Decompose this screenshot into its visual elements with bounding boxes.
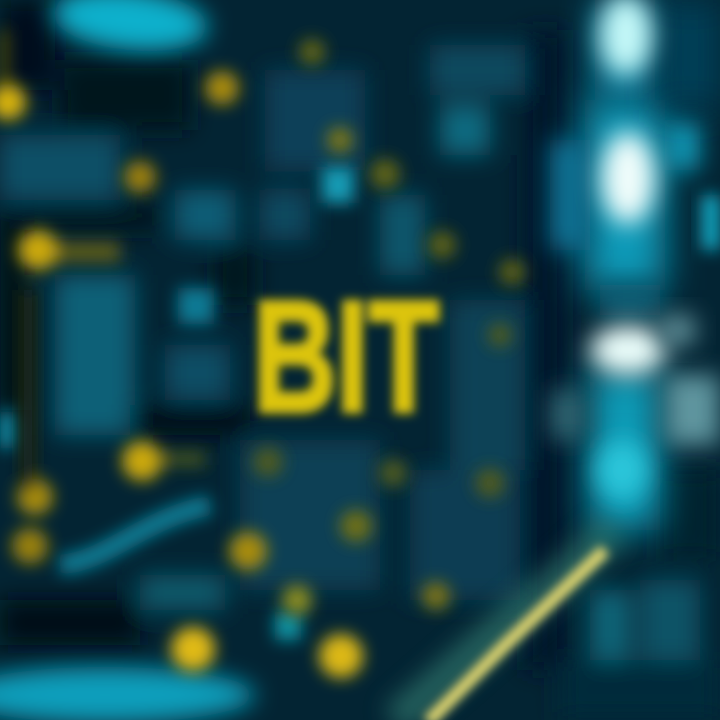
cyan glow: bottom left xyxy=(0,667,255,720)
bright light: lower xyxy=(590,325,666,375)
pale grey panel at right xyxy=(665,375,720,445)
bright light: top xyxy=(600,0,652,75)
column glow xyxy=(585,100,665,290)
cyan wave trace xyxy=(60,505,210,565)
cyan glow: top left xyxy=(49,0,211,58)
yellow diagonal light streak xyxy=(428,550,605,720)
BIT heading: BIT xyxy=(253,269,439,445)
cyan light below xyxy=(596,440,648,500)
bright light: middle xyxy=(601,132,655,224)
right glowing column xyxy=(550,0,720,530)
small cyan chips xyxy=(0,167,354,640)
streak glow xyxy=(395,530,615,720)
yellow circuit nodes xyxy=(0,30,525,678)
